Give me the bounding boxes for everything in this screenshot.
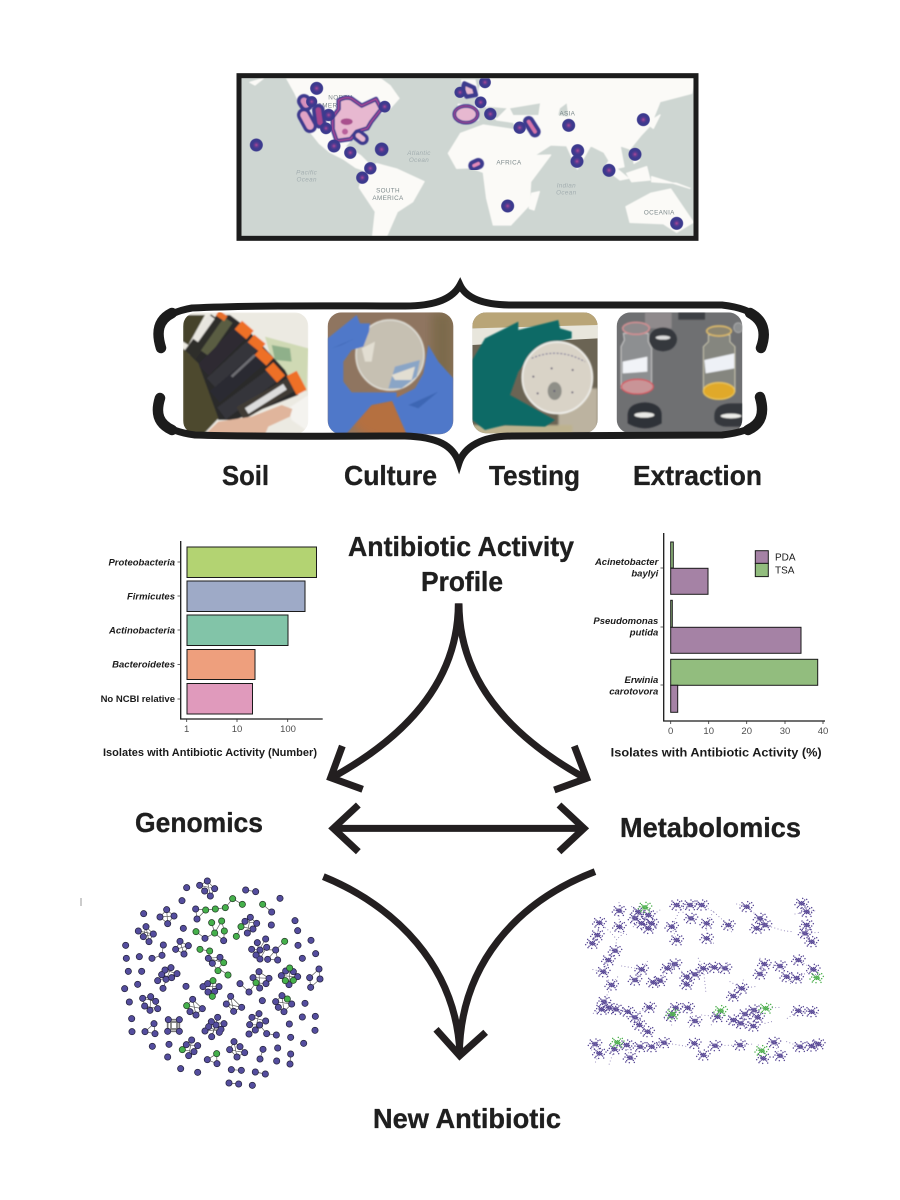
bar chart: isolates by indicator strain and medium: baylyi: [631, 568, 659, 580]
heading: Metabolomics: Metabolomics: [620, 812, 801, 843]
bar chart: isolates by indicator strain and medium: Isolates with Antibiotic Activity (%): [611, 746, 822, 760]
bar chart: isolates by phylum: Actinobacteria: [108, 626, 175, 636]
bar chart: isolates by phylum: Firmicutes: [127, 592, 175, 602]
heading: New Antibiotic: New Antibiotic: [373, 1103, 561, 1134]
arrow: genomics to new antibiotic: [323, 877, 460, 1055]
ocean labels: Ocean: [409, 157, 429, 164]
photo: solvent extraction vials: [617, 312, 743, 433]
arrow: profile to metabolomics: [459, 603, 587, 790]
bar chart: isolates by phylum: 1: [184, 724, 189, 735]
bar chart: isolates by phylum: [101, 541, 323, 759]
map labels: SOUTH: [376, 187, 400, 194]
chart legend: PDA: [775, 552, 796, 564]
arrowhead: new antibiotic: [436, 1029, 486, 1056]
heading: Extraction: Extraction: [633, 460, 762, 491]
heading: Culture: Culture: [344, 460, 437, 491]
bar chart: isolates by phylum: No NCBI relative: [101, 694, 175, 705]
heading: Antibiotic Activity Profile: [348, 531, 574, 597]
arrow: profile to genomics: [331, 603, 458, 789]
ocean labels: Ocean: [297, 177, 317, 184]
ocean labels: Indian: [557, 182, 576, 189]
bar chart: isolates by indicator strain and medium: 20: [741, 726, 752, 737]
chart legend: [755, 551, 796, 577]
map labels: ASIA: [559, 111, 576, 118]
map labels: AFRICA: [496, 160, 522, 167]
map labels: AMERICA: [372, 195, 404, 202]
photo: soil samples: [183, 312, 308, 434]
ocean labels: Pacific: [296, 169, 318, 176]
heading: Antibiotic Activity Profile: Antibiotic Activity: [348, 531, 574, 562]
heading: Antibiotic Activity Profile: Profile: [421, 566, 503, 597]
bar chart: isolates by indicator strain and medium: Pseudomonas: [593, 616, 658, 627]
map labels: OCEANIA: [644, 210, 675, 217]
bar chart: isolates by indicator strain and medium: carotovora: [609, 686, 658, 698]
bar chart: isolates by indicator strain and medium: putida: [629, 628, 658, 638]
map labels: NORTH: [328, 95, 352, 102]
bar chart: isolates by indicator strain and medium: [593, 533, 828, 760]
bar chart: isolates by phylum: 100: [280, 724, 296, 735]
bar chart: isolates by phylum: Proteobacteria: [108, 558, 175, 568]
ocean labels: Atlantic: [406, 150, 431, 157]
arrows connecting profile, omics and new antibiotic: [323, 603, 595, 1056]
heading: Testing: Testing: [489, 460, 580, 491]
arrow: metabolomics to new antibiotic: [459, 872, 595, 1055]
map labels: AMERICA: [318, 102, 349, 109]
network: genomics gene cluster families: [125, 881, 320, 1085]
curly brace grouping the four workflow photos: [158, 285, 764, 463]
arrow: genomics and metabolomics double-headed: [333, 805, 584, 852]
bar chart: isolates by phylum: Bacteroidetes: [112, 660, 175, 670]
ocean labels: [296, 150, 577, 197]
ocean labels: Ocean: [556, 190, 577, 197]
bar chart: isolates by indicator strain and medium: 10: [703, 726, 714, 737]
photo: culture plate: [328, 312, 453, 442]
photo: antibiotic testing plate: [472, 312, 598, 435]
bar chart: isolates by indicator strain and medium: 0: [668, 726, 673, 737]
heading: Soil: Soil: [222, 460, 269, 491]
bar chart: isolates by indicator strain and medium: Erwinia: [625, 675, 658, 686]
bar chart: isolates by phylum: Isolates with Antibiotic Activity (Number): [103, 747, 317, 759]
map frame: [239, 76, 696, 238]
world map: global soil sampling sites: [239, 76, 696, 238]
bar chart: isolates by indicator strain and medium: Acinetobacter: [594, 557, 660, 568]
map labels: [318, 95, 675, 217]
chart legend: TSA: [775, 566, 795, 576]
bar chart: isolates by indicator strain and medium: 30: [780, 726, 790, 737]
network: metabolomics molecular network: [586, 898, 825, 1067]
heading: Genomics: Genomics: [135, 807, 263, 838]
heatmap blobs: [304, 83, 535, 166]
bar chart: isolates by indicator strain and medium: 40: [818, 726, 828, 737]
bar chart: isolates by phylum: 10: [232, 724, 242, 735]
